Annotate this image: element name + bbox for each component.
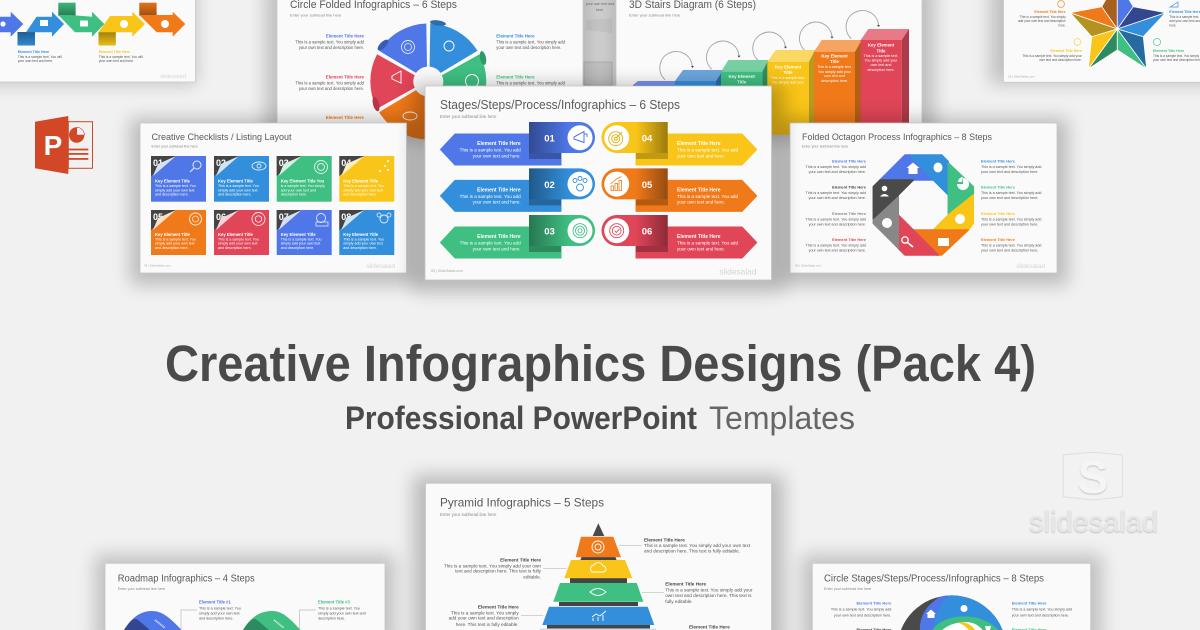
- star captions: This is a sample text. You simply add your: [1022, 54, 1083, 58]
- circle folded captions: This is a sample text. You simply add: [295, 80, 365, 85]
- card 01: and description here.: [155, 193, 189, 197]
- card 04: simply add your own text: [343, 188, 383, 192]
- roadmap captions: [199, 600, 366, 620]
- pyramid captions: editable.: [523, 575, 541, 580]
- octagon left captions: This is a sample text. You simply add: [806, 217, 866, 221]
- roadmap humps: [124, 611, 303, 630]
- step 01: [440, 122, 595, 165]
- card 05: 05: [153, 212, 163, 222]
- circle folded captions: Element Title Here: [496, 74, 535, 79]
- octagon left captions: Element Title Here: [832, 158, 867, 163]
- star captions: Element Title Here: [1169, 10, 1200, 14]
- stages heading: [440, 98, 680, 119]
- card 07: 07: [279, 212, 289, 222]
- octagon icons: [880, 162, 969, 247]
- step 03: your own text and here.: [473, 246, 521, 251]
- roadmap heading: [118, 574, 255, 591]
- card 02: 02: [216, 158, 226, 168]
- circle stages heading: Circle Stages/Steps/Process/Infographics – 8 Steps: [824, 574, 1044, 585]
- octagon right captions: your own text and description here.: [981, 222, 1038, 226]
- octagon left captions: your own text and description here.: [809, 248, 866, 252]
- card 03: is a sample text. You simply: [281, 184, 325, 188]
- step 03: [440, 215, 595, 258]
- pyramid chart: [540, 523, 656, 630]
- card 08: [339, 210, 394, 255]
- octagon left captions: This is a sample text. You simply add: [806, 244, 866, 248]
- circle folded captions: Element Title Here: [326, 115, 365, 120]
- card 03: add your own text and: [281, 188, 316, 192]
- circle stages chart: [901, 595, 1002, 630]
- stair labels: This is a sample text.: [864, 54, 898, 58]
- step 05: [602, 168, 757, 211]
- card 04: This is a sample text. You: [343, 184, 384, 188]
- pyramid captions: This is a sample text. You simply add your own text: [644, 543, 751, 548]
- step 01: 01: [544, 134, 555, 145]
- card 08: This is a sample text. You: [343, 237, 384, 241]
- step 02: Element Title Here: [477, 187, 521, 193]
- checklist heading: [152, 132, 292, 149]
- stair labels: You simply add your: [864, 59, 898, 63]
- stair labels: Key Element: [729, 74, 755, 79]
- step 06: 06: [642, 227, 652, 238]
- panel: roadmap slide: [95, 555, 395, 630]
- stages heading: Stages/Steps/Process/Infographics – 6 Steps: [440, 98, 680, 112]
- stair columns: [633, 29, 909, 135]
- panel: circle stages slide: [802, 555, 1102, 630]
- card 02: This is a sample text. You: [218, 184, 259, 188]
- star captions: 16 | SlideSalad.com: [1008, 74, 1035, 78]
- panel: background blurred slide: your own text and: [586, 2, 614, 6]
- card 08: and description here.: [343, 246, 377, 250]
- card 02: [214, 156, 269, 202]
- arrow slide captions: your own text and here.: [18, 59, 53, 63]
- subtitle: Templates: [709, 400, 855, 436]
- stages heading: Enter your subhead line here: [440, 114, 497, 119]
- card 07: [277, 210, 332, 255]
- step 02: 02: [544, 180, 555, 191]
- step 05: This is a sample text. You add: [677, 194, 738, 199]
- step 01: your own text and here.: [473, 153, 521, 158]
- circle folded captions: This is a sample text. You simply add: [295, 40, 365, 45]
- octagon left captions: This is a sample text. You simply add: [806, 165, 866, 169]
- pyramid captions: Element Title Here: [689, 624, 730, 629]
- roadmap captions: Element Title #1: [199, 600, 231, 605]
- card 02: and description here.: [218, 193, 252, 197]
- octagon left captions: This is a sample text. You simply add: [806, 191, 866, 195]
- roadmap captions: Element Title #3: [318, 600, 350, 605]
- roadmap captions: simply add your own text: [199, 611, 240, 615]
- checklist heading: Creative Checklists / Listing Layout: [152, 132, 292, 143]
- card 07: simply add your own text: [281, 242, 320, 246]
- arrow slide captions: This is a sample text. You will: [18, 55, 62, 59]
- checklist footer: [144, 263, 395, 270]
- stair curved arrows: [660, 10, 880, 80]
- roadmap captions: This is a sample text. You: [199, 606, 241, 610]
- arrow slide captions: slidesalad: [160, 74, 186, 80]
- circle folded captions: your own text and description here.: [299, 45, 364, 50]
- star small icons: [1058, 1, 1178, 46]
- pyramid captions: This is a sample text. You simply add your own: [444, 563, 541, 568]
- card 05: simply add your own text: [155, 242, 195, 246]
- stair labels: own text and: [824, 74, 845, 78]
- octagon left captions: your own text and description here.: [809, 222, 866, 226]
- card 07: Key Element Title: [281, 232, 316, 237]
- stair labels: Title: [830, 59, 840, 64]
- panel: stages/steps 6-step slide: [413, 84, 784, 292]
- star captions: Element Title Here: [1153, 49, 1184, 53]
- step 04: [602, 122, 757, 165]
- card 07: and description here.: [281, 246, 314, 250]
- roadmap captions: This is a sample text. You: [318, 606, 360, 610]
- circle stages captions: your own text and description here.: [1012, 614, 1069, 618]
- pyramid captions: Element Title Here: [478, 604, 519, 609]
- roadmap captions: description here.: [318, 616, 345, 620]
- step 04: This is a sample text. You add: [677, 148, 738, 153]
- step 04: Element Title Here: [677, 141, 721, 147]
- card 08: 08: [341, 212, 351, 222]
- card 01: simply add your own text: [155, 188, 195, 192]
- circle stages heading: Enter your subhead line here: [824, 587, 871, 591]
- stair labels: You simply add your: [818, 70, 852, 74]
- step 02: This is a sample text. You add: [460, 194, 521, 199]
- pyramid captions: here. This text is fully editable.: [456, 622, 519, 627]
- stair labels: [729, 43, 898, 84]
- arrow slide captions: Element Title Here: [99, 50, 130, 54]
- pyramid heading: Pyramid Infographics – 5 Steps: [440, 496, 604, 510]
- checklist footer: slidesalad: [366, 263, 395, 270]
- octagon right captions: This is a sample text. You simply add: [981, 191, 1041, 195]
- star captions: Element Title Here: [1034, 10, 1066, 14]
- stair labels: Title: [877, 48, 886, 53]
- card 04: [339, 156, 394, 202]
- subtitle: Professional PowerPoint: [345, 400, 697, 436]
- card 05: Key Element Title: [155, 232, 191, 237]
- circle folded captions: your own text and description here.: [496, 45, 561, 50]
- star captions: add your own text and description: [1018, 19, 1066, 23]
- star captions: [1008, 10, 1200, 79]
- card 06: [214, 210, 269, 255]
- card 01: Key Element Title: [155, 179, 191, 184]
- roadmap leader lines: [181, 610, 316, 630]
- stair labels: description here.: [867, 68, 895, 72]
- panel: circle folded slide: [265, 0, 595, 140]
- octagon chart: [873, 155, 973, 255]
- star captions: Element Title Here: [1050, 49, 1082, 53]
- panel: arrow process slide (top left): [0, 0, 196, 84]
- checklist heading: Enter your subhead line here: [152, 145, 198, 149]
- step 05: your own text and here.: [677, 200, 725, 205]
- panel: 3D stairs slide: [605, 0, 935, 140]
- stages footer: 83 | SlideSalad.com: [431, 269, 463, 273]
- octagon left captions: Element Title Here: [832, 211, 867, 216]
- stages footer: slidesalad: [719, 266, 757, 276]
- step 05: 05: [642, 180, 653, 191]
- card 06: Key Element Title: [218, 232, 254, 237]
- arrow slide captions: This is a sample text. You will: [99, 55, 143, 59]
- card 06: simply add your own text: [218, 242, 258, 246]
- step 03: Element Title Here: [477, 234, 521, 240]
- step 03: 03: [544, 227, 555, 238]
- card 03: Key Element Title You: [281, 179, 325, 184]
- stair labels: Title: [737, 80, 747, 84]
- circle folded captions: This is a sample text. You simply add: [496, 80, 566, 85]
- panel: creative checklists slide: [130, 118, 418, 285]
- octagon right captions: your own text and description here.: [981, 248, 1038, 252]
- card 06: and description here.: [218, 246, 252, 250]
- checklist footer: 43 | SlideSalad.com: [144, 264, 171, 268]
- card 05: and description here.: [155, 246, 189, 250]
- step 01: This is a sample text. You add: [460, 148, 521, 153]
- icon: PowerPoint logo: [35, 116, 92, 174]
- pyramid captions: Element Title Here: [500, 557, 541, 562]
- octagon right captions: Element Title Here: [981, 158, 1016, 163]
- card 03: [277, 156, 332, 202]
- octagon right captions: your own text and description here.: [981, 196, 1038, 200]
- octagon right captions: This is a sample text. You simply add: [981, 165, 1041, 169]
- circle folded captions: Element Title Here: [496, 34, 535, 39]
- pyramid captions: fully editable.: [665, 599, 693, 604]
- stair labels: description here.: [821, 79, 848, 83]
- logo: slidesalad embossed: S: [1078, 451, 1108, 503]
- pyramid leader lines: [521, 546, 664, 616]
- card 05: This is a sample text. You: [155, 237, 196, 241]
- roadmap captions: and description here.: [199, 616, 233, 620]
- card 06: 06: [216, 212, 226, 222]
- circle folded heading: Enter your subhead line here: [290, 12, 342, 18]
- panel: background blurred slide: here.: [596, 8, 604, 12]
- card 08: Key Element Title: [343, 232, 379, 237]
- circle stages captions: your own text and description here.: [834, 614, 891, 618]
- circle folded captions: your own text and description here.: [299, 86, 364, 91]
- pyramid captions: [444, 537, 753, 629]
- octagon footer: [795, 263, 1045, 270]
- step 06: This is a sample text. You add: [677, 241, 738, 246]
- octagon right captions: This is a sample text. You simply add: [981, 244, 1041, 248]
- step 02: [440, 168, 595, 211]
- circle folded heading: [290, 0, 457, 18]
- circle chart: [370, 19, 487, 139]
- octagon right captions: Element Title Here: [981, 185, 1016, 190]
- step 02: your own text and here.: [473, 200, 521, 205]
- step 06: your own text and here.: [677, 246, 725, 251]
- arrow slide captions: your own text and here.: [99, 59, 134, 63]
- octagon right captions: [981, 158, 1041, 252]
- card 05: [151, 210, 206, 255]
- octagon left captions: your own text and description here.: [809, 170, 866, 174]
- card 01: [151, 156, 206, 202]
- star captions: here.: [1169, 23, 1177, 27]
- octagon right captions: This is a sample text. You simply add: [981, 217, 1041, 221]
- card 06: This is a sample text. You: [218, 237, 259, 241]
- stair labels: Key Element: [868, 43, 895, 48]
- circle folded captions: [295, 34, 566, 120]
- star chart: [1070, 0, 1166, 69]
- circle stages captions: Element Title Here: [1012, 601, 1047, 606]
- octagon right captions: Element Title Here: [981, 211, 1016, 216]
- card 01: This is a sample text. You: [155, 184, 196, 188]
- octagon left captions: Element Title Here: [832, 237, 867, 242]
- stair labels: Title: [784, 70, 793, 75]
- arrow chain: [0, 3, 185, 45]
- step 06: Element Title Here: [677, 234, 721, 240]
- stair labels: Key Element: [821, 54, 848, 58]
- octagon footer: 30 | SlideSalad.com: [795, 264, 822, 268]
- step 01: Element Title Here: [477, 141, 521, 147]
- card 08: simply add your own text: [343, 242, 383, 246]
- stages footer: [431, 266, 757, 276]
- stair labels: Key Element: [775, 64, 802, 70]
- octagon right captions: your own text and description here.: [981, 170, 1038, 174]
- stair labels: own text and: [871, 63, 891, 67]
- pyramid captions: add your own text and description: [449, 616, 519, 621]
- icon: PowerPoint logo: P: [44, 130, 62, 161]
- octagon footer: slidesalad: [1016, 263, 1045, 270]
- panel: star slide (top right): [990, 0, 1200, 84]
- step 04: 04: [642, 134, 653, 145]
- panel: folded octagon slide: [780, 118, 1068, 285]
- arrow slide captions: [18, 50, 186, 80]
- card 02: Key Element Title: [218, 179, 254, 184]
- pyramid heading: [440, 496, 604, 517]
- roadmap heading: Enter your subhead line here: [118, 587, 165, 591]
- pyramid heading: Enter your subhead line here: [440, 512, 497, 517]
- stair labels: This is a sample text.: [817, 65, 852, 69]
- panel: pyramid slide: [413, 475, 784, 630]
- stairs heading: [629, 0, 756, 18]
- card 04: Key Element Title: [343, 179, 379, 184]
- circle folded captions: Element Title Here: [326, 34, 365, 39]
- circle stages heading: [824, 574, 1044, 591]
- logo: slidesalad embossed: [1029, 451, 1158, 538]
- card 01: 01: [153, 158, 163, 168]
- roadmap captions: simply add your own text and: [318, 611, 366, 615]
- arrow slide captions: Element Title Here: [18, 50, 49, 54]
- circle stages captions: This is a sample text. You simply add: [1012, 608, 1072, 612]
- roadmap heading: Roadmap Infographics – 4 Steps: [118, 574, 255, 585]
- pyramid captions: and description here. This text is fully editable.: [644, 549, 740, 554]
- circle folded captions: This is a sample text. You simply add: [496, 40, 566, 45]
- card 04: 04: [341, 158, 351, 168]
- circle folded captions: Element Title Here: [326, 74, 365, 79]
- step 03: This is a sample text. You add: [460, 241, 521, 246]
- circle stages captions: [831, 601, 1072, 630]
- step 06: [602, 215, 757, 258]
- pyramid captions: Element Title Here: [644, 537, 685, 542]
- octagon heading: [802, 132, 992, 149]
- octagon left captions: Element Title Here: [832, 185, 867, 190]
- card 04: and description here.: [343, 193, 377, 197]
- title: Creative Infographics Designs (Pack 4): [165, 335, 1036, 392]
- card 02: simply add your own text: [218, 188, 258, 192]
- step 05: Element Title Here: [677, 187, 721, 193]
- octagon left captions: your own text and description here.: [809, 196, 866, 200]
- star captions: own text and description here.: [1039, 58, 1082, 62]
- card 03: 03: [279, 158, 289, 168]
- stairs heading: Enter your subhead line here: [629, 12, 681, 18]
- octagon heading: Folded Octagon Process Infographics – 8 Steps: [802, 132, 992, 143]
- octagon right captions: Element Title Here: [981, 237, 1016, 242]
- panel: background blurred slide: [578, 0, 620, 133]
- circle stages captions: This is a sample text. You simply add: [831, 608, 891, 612]
- logo: slidesalad embossed: slidesalad: [1029, 506, 1158, 538]
- pyramid captions: This is a sample text. You simply add your: [665, 587, 753, 592]
- card 03: description here.: [281, 193, 307, 197]
- star captions: here.: [1058, 23, 1066, 27]
- pyramid captions: own text and description here. This text is: [665, 593, 752, 598]
- step 04: your own text and here.: [677, 153, 725, 158]
- octagon left captions: [806, 158, 867, 252]
- stair labels: You simply add your: [771, 80, 805, 84]
- pyramid captions: Element Title Here: [665, 581, 707, 586]
- stair labels: This is a sample text.: [771, 76, 805, 80]
- star captions: This is a sample text. You simply: [1020, 15, 1066, 19]
- pyramid captions: This is a sample text. You simply: [451, 610, 519, 615]
- card 07: This is a sample text. You: [281, 237, 321, 241]
- circle stages captions: Element Title Here: [856, 601, 892, 606]
- pyramid captions: text and description here. This text is fully: [455, 569, 542, 574]
- octagon heading: Enter your subhead line here: [802, 145, 848, 149]
